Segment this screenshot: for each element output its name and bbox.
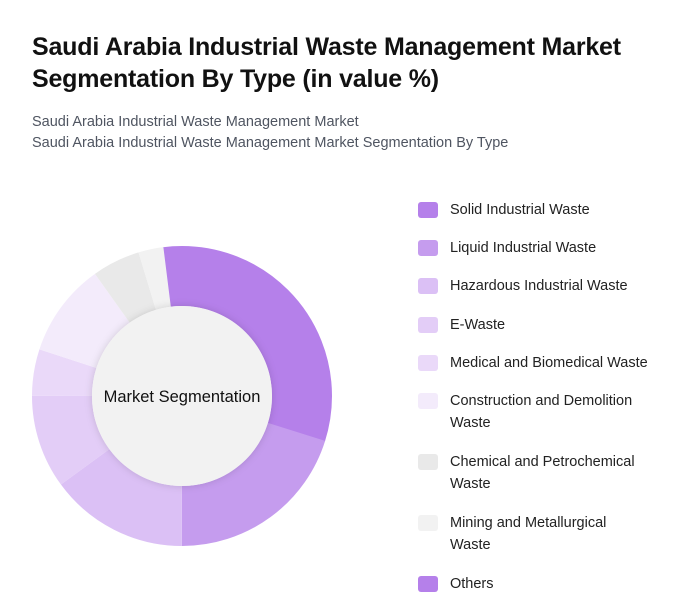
text: Others — [450, 576, 494, 592]
legend: Medical and Biomedical Waste — [450, 355, 648, 371]
legend: Solid Industrial Waste — [450, 202, 590, 218]
subtitle: Saudi Arabia Industrial Waste Management Market Segmentation By Type — [32, 135, 508, 151]
subtitle — [32, 114, 508, 151]
subtitle: Saudi Arabia Industrial Waste Management Market — [32, 114, 359, 130]
legend: Waste — [450, 476, 491, 492]
legend: Liquid Industrial Waste — [450, 240, 596, 256]
legend: Chemical and Petrochemical — [450, 454, 635, 470]
legend: Mining and Metallurgical — [450, 515, 606, 531]
title — [32, 33, 621, 93]
title: Segmentation By Type (in value %) — [32, 65, 439, 93]
donut chart — [32, 246, 332, 546]
legend: Waste — [450, 415, 491, 431]
title: Saudi Arabia Industrial Waste Management Market — [32, 33, 621, 61]
legend: Construction and Demolition — [450, 393, 632, 409]
legend: Waste — [450, 537, 491, 553]
legend: E-Waste — [450, 317, 505, 333]
center label — [92, 306, 272, 486]
legend — [418, 202, 648, 592]
center label: Market Segmentation — [104, 388, 260, 406]
legend: Hazardous Industrial Waste — [450, 278, 628, 294]
